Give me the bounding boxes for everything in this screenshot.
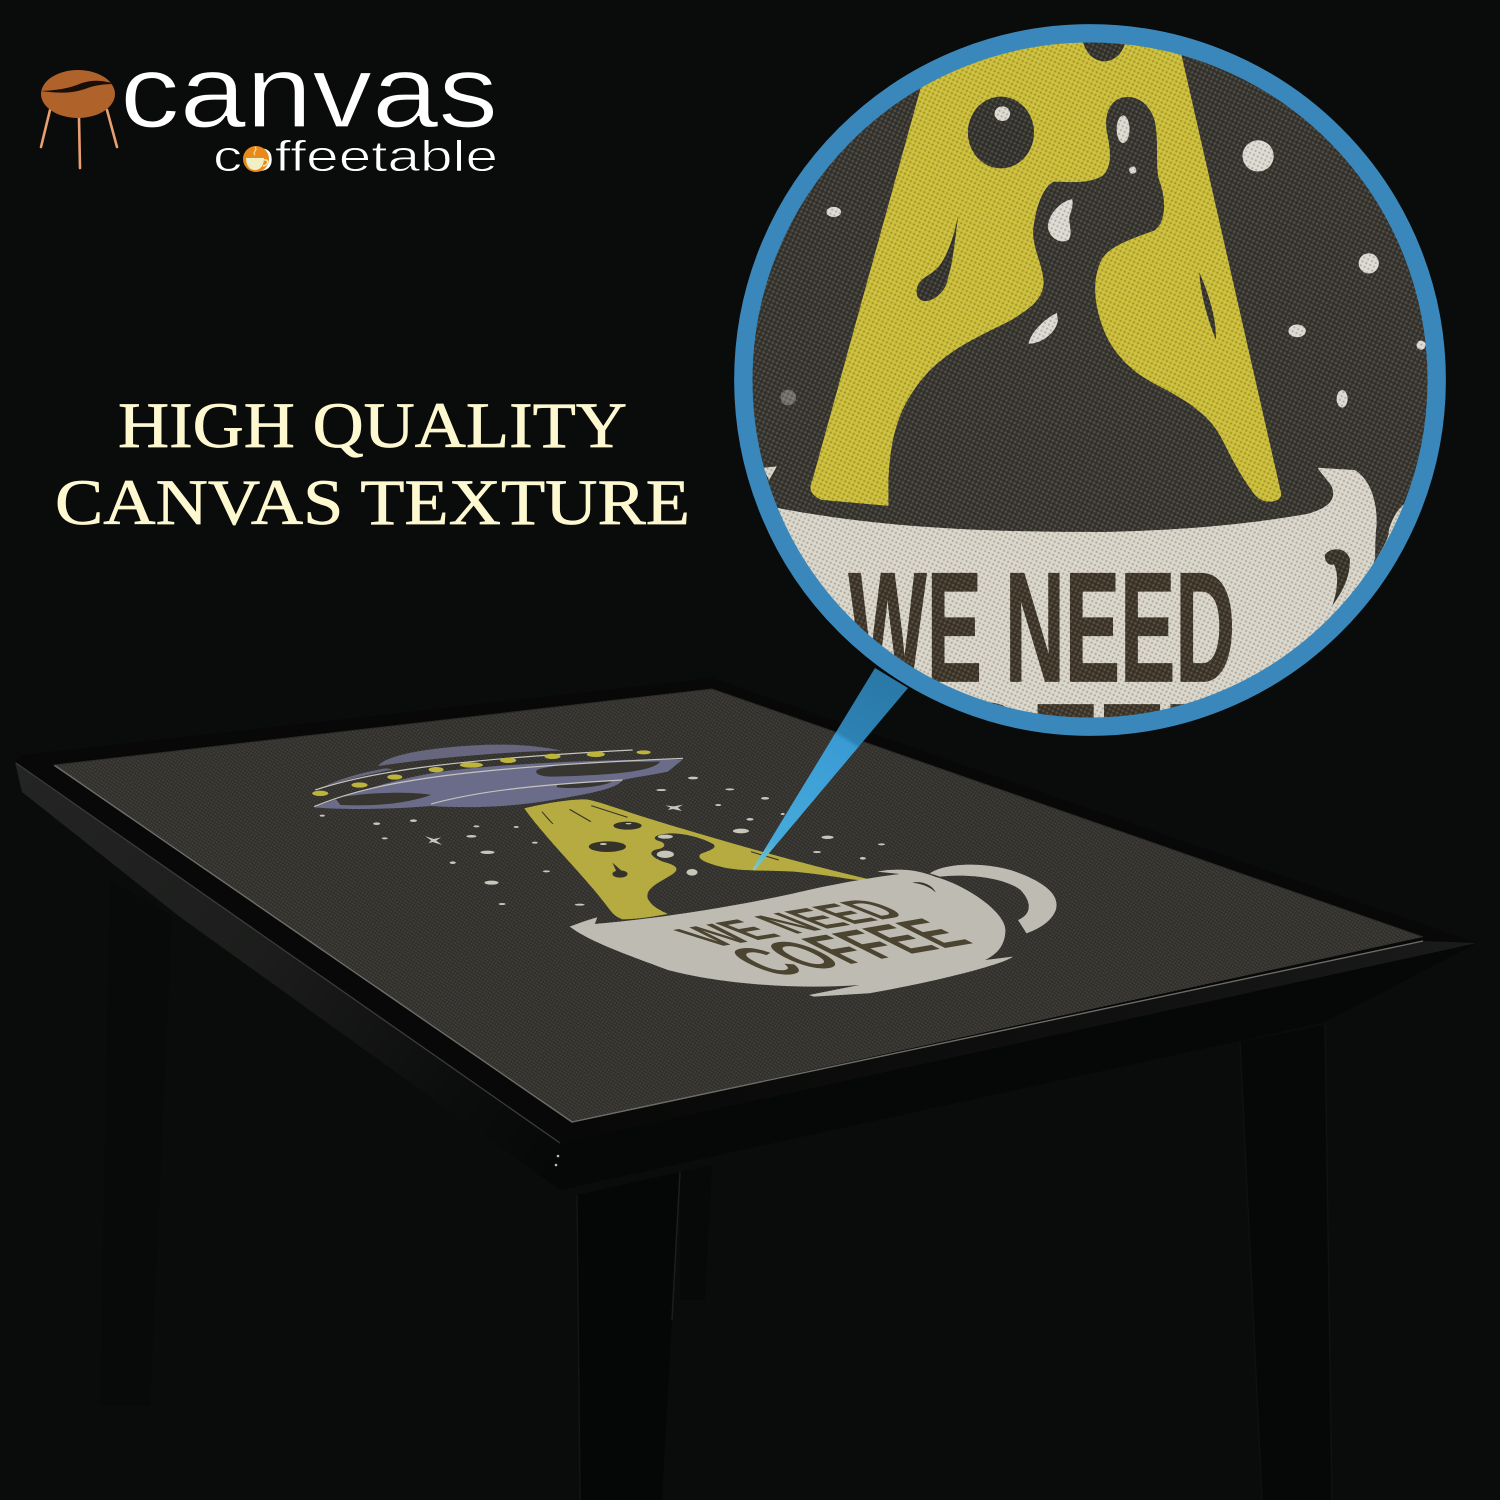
logo (41, 34, 498, 181)
magnified canvas lens (734, 24, 1446, 736)
heading (55, 390, 690, 539)
frame right band (560, 941, 1477, 1143)
cup lettering on table: WE NEED (659, 893, 923, 952)
magnified white specks (781, 106, 1426, 408)
coffee cup (570, 865, 1057, 997)
logo coffee bean (41, 70, 115, 118)
logo table legs (41, 110, 117, 168)
magnified cheese beam (810, 38, 1281, 506)
left side face of frame (15, 762, 560, 1190)
stars (320, 777, 885, 906)
lens ring (743, 33, 1437, 727)
heading: HIGH QUALITY (118, 390, 627, 462)
cheese beam (524, 799, 869, 919)
magnified lettering (848, 572, 1232, 718)
heading: CANVAS TEXTURE (55, 467, 690, 539)
printed artwork on table (312, 745, 1057, 997)
frame top surface (15, 678, 1477, 1143)
frame highlight lines (16, 689, 1423, 1143)
cheese holes (542, 806, 779, 878)
lens artwork (752, 42, 1428, 718)
callout pointer (752, 668, 908, 870)
right side face of frame (560, 943, 1477, 1190)
magnified holes (917, 41, 1216, 340)
UFO (312, 745, 683, 809)
drips and highlights (600, 823, 698, 876)
logo bean slit (41, 81, 115, 93)
table legs (100, 880, 1332, 1500)
cup lettering on table (659, 893, 991, 985)
cup comma mark (1325, 549, 1350, 605)
logo tagline: coffeetable (213, 132, 498, 181)
fabric texture overlay (752, 42, 1428, 718)
logo wordmark: canvas (120, 34, 498, 149)
cup lettering on table: COFFEE (709, 911, 991, 985)
table top with frame and canvas (15, 678, 1477, 1190)
magnified lettering: COFFEE (868, 672, 1309, 847)
logo cup icon (243, 146, 269, 172)
magnified cup (763, 466, 1414, 736)
canvas surface (54, 689, 1423, 1122)
rivets (555, 1155, 559, 1166)
